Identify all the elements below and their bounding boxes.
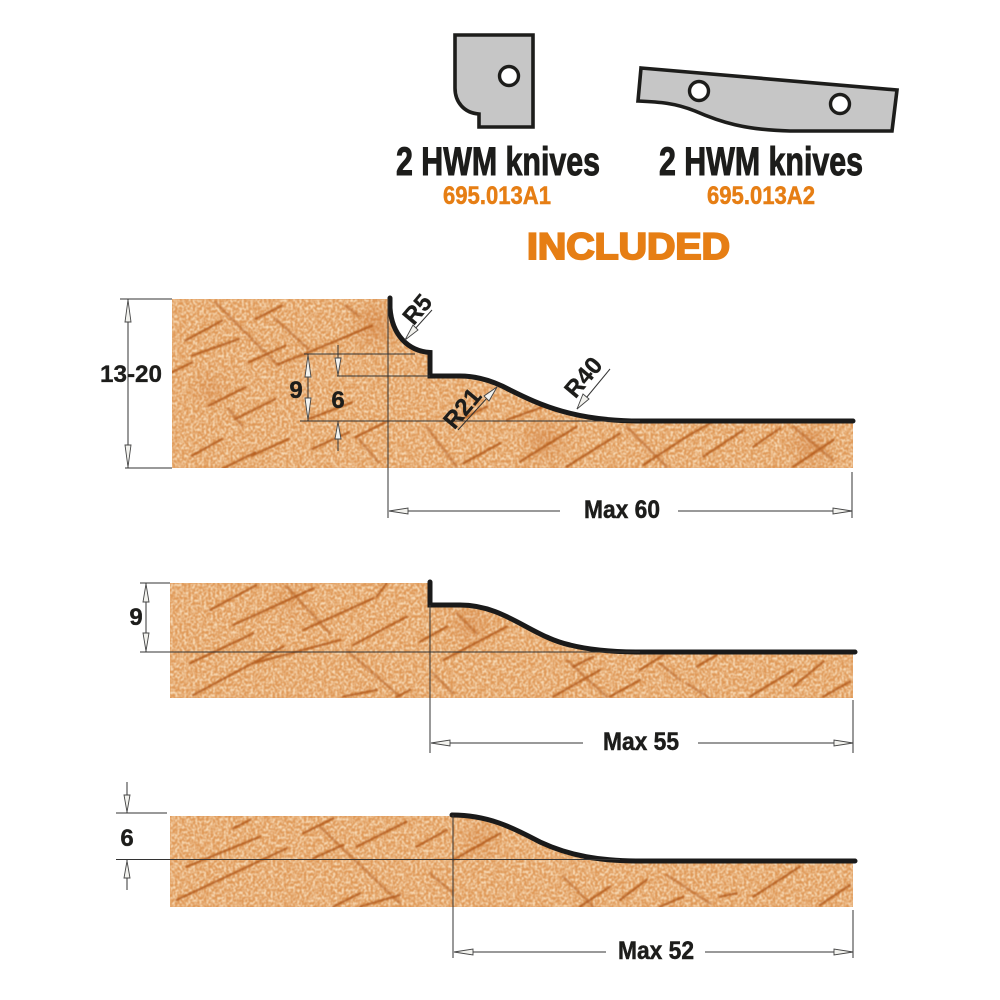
dimension: 6 (profile 3): [116, 782, 620, 890]
heading: INCLUDED: INCLUDED: [527, 226, 730, 267]
profile 2 cutting line: [430, 582, 855, 652]
dimension: 6 (profile 3): 6: [120, 825, 134, 852]
dimension: 9 (profile 2): 9: [129, 604, 143, 631]
dimension: Max 60: [388, 299, 852, 524]
radius label: R40: R40: [559, 352, 608, 403]
profile 3 cutting line: [452, 815, 855, 861]
panel: profile 2 wood: [170, 583, 853, 698]
label: 2 HWM knives left: 2 HWM knives: [396, 140, 600, 184]
profile 1 cutting line: [390, 298, 853, 421]
radius label: R21: R21: [438, 383, 487, 434]
panel: profile 3 wood: [170, 816, 853, 907]
part number: 695.013A2: 695.013A2: [707, 182, 815, 210]
dimension: 13-20: 13-20: [100, 361, 162, 388]
dimension: Max 60: Max 60: [584, 496, 660, 524]
knife icon: 695.013A2: [638, 68, 897, 131]
dimension: Max 52: Max 52: [618, 937, 694, 965]
dimension: Max 55: Max 55: [603, 728, 679, 756]
label: 2 HWM knives right: 2 HWM knives: [659, 140, 863, 184]
dimension: 9 (profile 2): [129, 583, 640, 652]
dimension: 13-20: [100, 299, 172, 468]
knife icon: 695.013A1: [455, 35, 533, 127]
dimension: 9: [289, 354, 640, 421]
panel: profile 1 wood: [172, 299, 853, 469]
dimension: 6: 6: [331, 387, 345, 414]
radius label: R5: R5: [398, 289, 438, 330]
dimension: Max 52: [453, 815, 853, 965]
dimension: 9: 9: [289, 377, 303, 404]
part number: 695.013A1: 695.013A1: [443, 182, 551, 210]
dimension: Max 55: [430, 605, 853, 756]
dimension: 6: [331, 345, 430, 451]
